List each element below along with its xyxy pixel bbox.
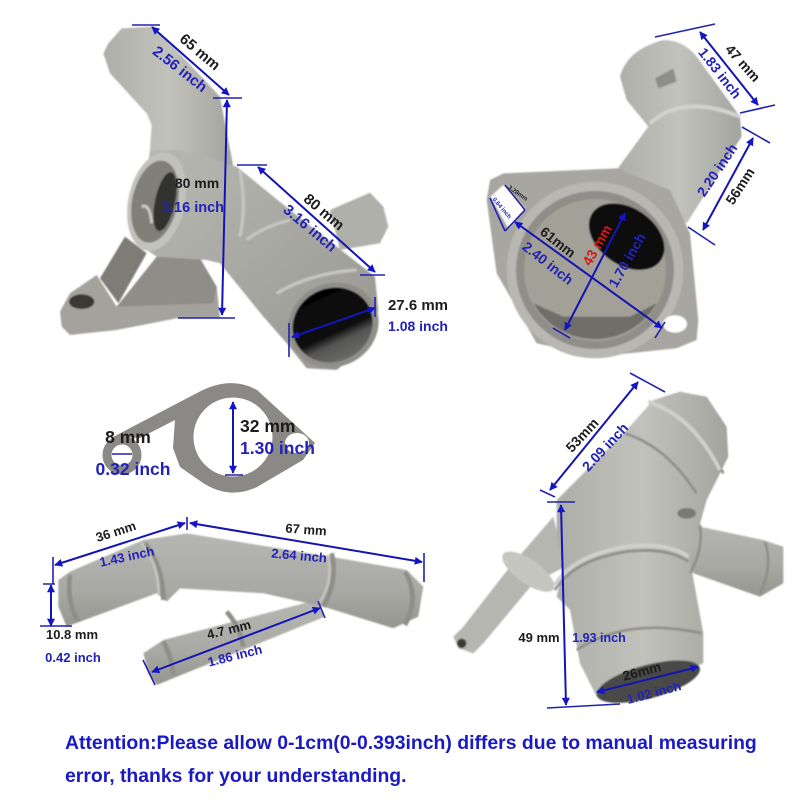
labels: 47 mm, 1.83 inch, 2.20 inch, 56mm, 61mm, 2.40 inch, 43 mm, 1.70 inch: 56mm [722, 165, 758, 207]
labels: 8 mm, 0.32 inch, 32 mm, 1.30 inch: 8 mm [105, 427, 151, 447]
panel: top-right flange view with dimensions [487, 24, 775, 358]
dimension arrows [40, 517, 424, 685]
labels: 65 mm, 2.56 inch, 80 mm, 3.16 inch, 27.6 mm, 1.08 inch [149, 31, 448, 334]
labels: 65 mm, 2.56 inch, 80 mm, 3.16 inch, 27.6 mm, 1.08 inch: 3.16 inch [280, 201, 340, 256]
dimension arrows [490, 24, 775, 338]
labels: 65 mm, 2.56 inch, 80 mm, 3.16 inch, 27.6 mm, 1.08 inch: 2.56 inch [149, 43, 210, 96]
labels: 36 mm, 1.43 inch, 67 mm, 2.64 inch, 4.7 mm, 1.86 inch, 10.8 mm, 0.42 inch: 1.43 inch [98, 543, 156, 570]
labels: 53mm, 2.09 inch, 49 mm, 1.93 inch, 26mm, 1.02 inch: 26mm [621, 659, 663, 684]
labels: 36 mm, 1.43 inch, 67 mm, 2.64 inch, 4.7 mm, 1.86 inch, 10.8 mm, 0.42 inch: 4.7 mm [205, 617, 252, 642]
labels: 47 mm, 1.83 inch, 2.20 inch, 56mm, 61mm, 2.40 inch, 43 mm, 1.70 inch: 43 mm [579, 222, 615, 268]
labels: 53mm, 2.09 inch, 49 mm, 1.93 inch, 26mm, 1.02 inch: 53mm [562, 415, 602, 455]
panel: gasket with dimensions [96, 383, 315, 493]
part photo: bent pipe [58, 533, 423, 685]
part photo: flanged elbow [487, 40, 742, 358]
panel: top-left housing with dimensions [60, 25, 448, 382]
part photo: gasket [107, 383, 315, 493]
panel: bent hose pipe with dimensions [40, 517, 424, 685]
dimension arrow [112, 402, 243, 475]
panel: bottom-right housing with dimensions [453, 373, 783, 712]
labels: 47 mm, 1.83 inch, 2.20 inch, 56mm, 61mm, 2.40 inch, 43 mm, 1.70 inch: 1.70 inch [605, 230, 649, 290]
dimension arrows [540, 373, 698, 708]
labels: 53mm, 2.09 inch, 49 mm, 1.93 inch, 26mm, 1.02 inch: 2.09 inch [579, 420, 631, 474]
labels: 65 mm, 2.56 inch, 80 mm, 3.16 inch, 27.6 mm, 1.08 inch: 80 mm [300, 191, 347, 234]
labels: 65 mm, 2.56 inch, 80 mm, 3.16 inch, 27.6 mm, 1.08 inch: 3.16 inch [162, 200, 224, 216]
labels: 65 mm, 2.56 inch, 80 mm, 3.16 inch, 27.6 mm, 1.08 inch: 65 mm [176, 31, 223, 74]
labels: 36 mm, 1.43 inch, 67 mm, 2.64 inch, 4.7 mm, 1.86 inch, 10.8 mm, 0.42 inch: 10.8 mm [46, 627, 98, 642]
labels: 8 mm, 0.32 inch, 32 mm, 1.30 inch: 0.32 inch [96, 459, 170, 479]
labels: 53mm, 2.09 inch, 49 mm, 1.93 inch, 26mm, 1.02 inch: 1.93 inch [572, 631, 626, 645]
labels: 47 mm, 1.83 inch, 2.20 inch, 56mm, 61mm, 2.40 inch, 43 mm, 1.70 inch: 2.20 inch [694, 141, 740, 199]
labels: 47 mm, 1.83 inch, 2.20 inch, 56mm, 61mm, 2.40 inch, 43 mm, 1.70 inch: 61mm [537, 223, 579, 261]
labels: 8 mm, 0.32 inch, 32 mm, 1.30 inch: 1.30 inch [240, 438, 315, 458]
labels: 36 mm, 1.43 inch, 67 mm, 2.64 inch, 4.7 mm, 1.86 inch, 10.8 mm, 0.42 inch [45, 518, 327, 670]
labels: 47 mm, 1.83 inch, 2.20 inch, 56mm, 61mm, 2.40 inch, 43 mm, 1.70 inch: 0.64 inch [491, 197, 512, 221]
labels: 36 mm, 1.43 inch, 67 mm, 2.64 inch, 4.7 mm, 1.86 inch, 10.8 mm, 0.42 inch: 2.64 inch [271, 546, 327, 565]
labels: 47 mm, 1.83 inch, 2.20 inch, 56mm, 61mm, 2.40 inch, 43 mm, 1.70 inch [491, 41, 764, 290]
labels: 47 mm, 1.83 inch, 2.20 inch, 56mm, 61mm, 2.40 inch, 43 mm, 1.70 inch: 47 mm [722, 41, 764, 85]
labels: 8 mm, 0.32 inch, 32 mm, 1.30 inch: 32 mm [240, 416, 295, 436]
labels: 47 mm, 1.83 inch, 2.20 inch, 56mm, 61mm, 2.40 inch, 43 mm, 1.70 inch: 1.83 inch [695, 44, 745, 102]
labels: 36 mm, 1.43 inch, 67 mm, 2.64 inch, 4.7 mm, 1.86 inch, 10.8 mm, 0.42 inch: 0.42 inch [45, 650, 101, 665]
labels: 53mm, 2.09 inch, 49 mm, 1.93 inch, 26mm, 1.02 inch: 49 mm [518, 630, 560, 645]
labels: 53mm, 2.09 inch, 49 mm, 1.93 inch, 26mm, 1.02 inch: 1.02 inch [625, 678, 683, 707]
labels: 36 mm, 1.43 inch, 67 mm, 2.64 inch, 4.7 mm, 1.86 inch, 10.8 mm, 0.42 inch: 36 mm [94, 518, 138, 545]
labels: 65 mm, 2.56 inch, 80 mm, 3.16 inch, 27.6 mm, 1.08 inch: 80 mm [175, 175, 219, 191]
dimension arrows [132, 25, 385, 357]
labels: 36 mm, 1.43 inch, 67 mm, 2.64 inch, 4.7 mm, 1.86 inch, 10.8 mm, 0.42 inch: 67 mm [285, 521, 327, 538]
part photo: three-way housing [60, 27, 393, 382]
labels: 47 mm, 1.83 inch, 2.20 inch, 56mm, 61mm, 2.40 inch, 43 mm, 1.70 inch: 3.28mm [507, 185, 528, 203]
attention note: error, thanks for your understanding. [65, 765, 407, 787]
labels: 47 mm, 1.83 inch, 2.20 inch, 56mm, 61mm, 2.40 inch, 43 mm, 1.70 inch: 2.40 inch [519, 238, 577, 288]
labels: 65 mm, 2.56 inch, 80 mm, 3.16 inch, 27.6 mm, 1.08 inch: 1.08 inch [388, 318, 448, 334]
labels: 65 mm, 2.56 inch, 80 mm, 3.16 inch, 27.6 mm, 1.08 inch: 27.6 mm [388, 297, 448, 314]
labels: 53mm, 2.09 inch, 49 mm, 1.93 inch, 26mm, 1.02 inch [518, 415, 683, 707]
attention note [65, 732, 757, 787]
labels: 8 mm, 0.32 inch, 32 mm, 1.30 inch [96, 416, 315, 479]
labels: 36 mm, 1.43 inch, 67 mm, 2.64 inch, 4.7 mm, 1.86 inch, 10.8 mm, 0.42 inch: 1.86 inch [206, 641, 264, 670]
part photo: T housing [453, 392, 783, 712]
attention note: Attention:Please allow 0-1cm(0-0.393inch) differs due to manual measuring [65, 732, 757, 754]
